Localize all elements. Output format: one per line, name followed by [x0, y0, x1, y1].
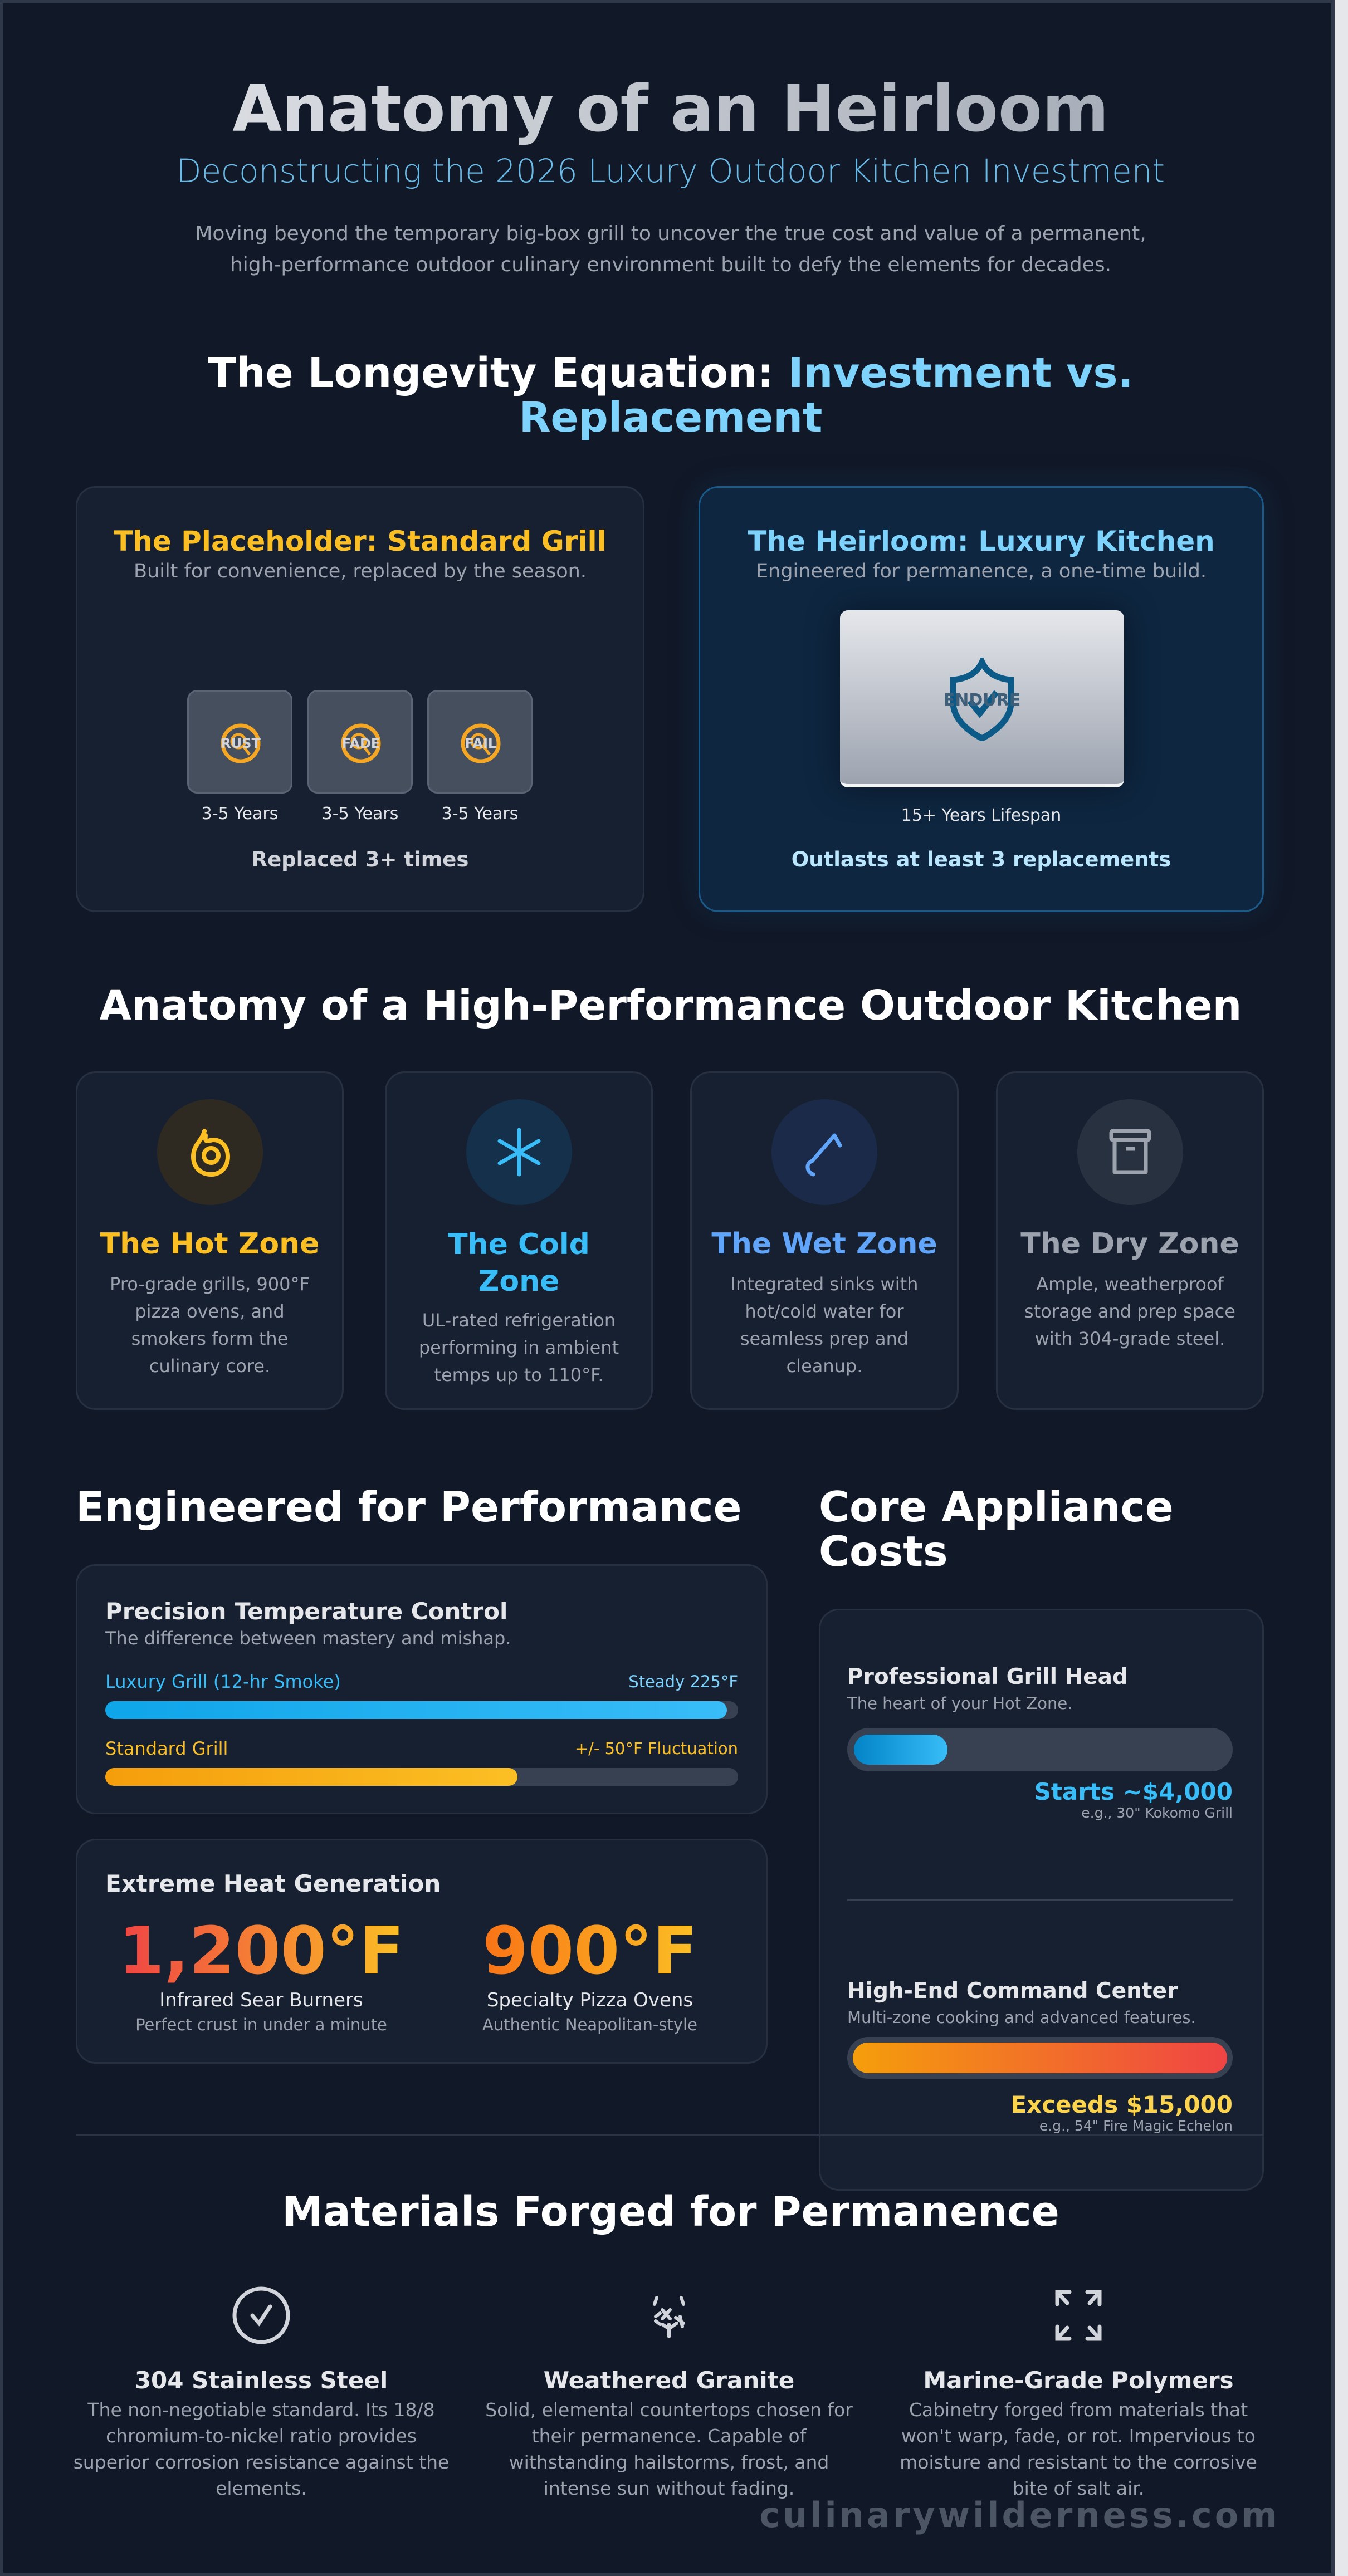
- lifespan label: 15+ Years Lifespan: [901, 806, 1061, 825]
- divider line: [76, 2134, 1264, 2136]
- bar: luxury: Steady 225°F: [628, 1672, 738, 1691]
- heading: anatomy: Anatomy of a High-Performance Outdoor Kitchen: [100, 982, 1242, 1030]
- stat: 1200F: 1,200°F: [119, 1912, 404, 1989]
- cost: command center: e.g., 54" Fire Magic Echelon: [1039, 2118, 1233, 2134]
- watermark: culinarywilderness.com: [759, 2495, 1280, 2535]
- zone text: Ample, weatherproof storage and prep space with 304-grade steel.: [1024, 1274, 1235, 1349]
- material: polymers: Cabinetry forged from materials that won't warp, fade, or rot. Impervious to moisture and resistant to the corrosive bite of salt air.: [900, 2399, 1257, 2499]
- card subtitle: Engineered for permanence, a one-time build.: [756, 560, 1207, 582]
- panel: hot zone: [76, 1071, 344, 1410]
- icon: storage box: [1077, 1099, 1183, 1205]
- zone title: [448, 1228, 590, 1298]
- cost: command center: Exceeds $15,000: [1010, 2091, 1233, 2118]
- panel: cold zone: [385, 1071, 653, 1410]
- cost: command center: [847, 1978, 1233, 2134]
- icons: rust fade fail: 3-5 Years: [322, 804, 398, 824]
- material: stainless steel: The non-negotiable standard. Its 18/8 chromium-to-nickel ratio provides superior corrosion resistance against the elements.: [74, 2399, 449, 2499]
- cost: grill head: e.g., 30" Kokomo Grill: [1081, 1805, 1233, 1821]
- panel: wet zone: [690, 1071, 959, 1410]
- stat: 1200F: [119, 1912, 404, 2034]
- summary: Outlasts at least 3 replacements: [792, 848, 1171, 871]
- bar: standard: +/- 50°F Fluctuation: [575, 1739, 738, 1758]
- heading: materials: Materials Forged for Permanence: [282, 2188, 1059, 2236]
- panel: extreme heat: [76, 1839, 768, 2064]
- icon: fail: [427, 690, 533, 794]
- card subtitle: Built for convenience, replaced by the season.: [134, 560, 587, 582]
- zone title: The Hot Zone: [100, 1227, 319, 1261]
- material: granite: Weathered Granite: [544, 2367, 794, 2394]
- material: stainless steel: [74, 2286, 449, 2499]
- cost: grill head: Starts ~$4,000: [1034, 1778, 1233, 1805]
- stat: 900F: Authentic Neapolitan-style: [482, 2015, 697, 2034]
- title: Anatomy of an Heirloom: [232, 72, 1109, 146]
- stat: 1200F: Perfect crust in under a minute: [135, 2015, 387, 2034]
- icon: fade: [307, 690, 413, 794]
- icon: expand arrows: [1055, 2290, 1102, 2341]
- icon: frost: [653, 2296, 685, 2338]
- panel title: Precision Temperature Control: [105, 1598, 507, 1625]
- stat: 900F: Specialty Pizza Ovens: [487, 1989, 693, 2011]
- cost: command center: High-End Command Center: [847, 1978, 1178, 2004]
- card title: The Heirloom: Luxury Kitchen: [748, 525, 1215, 557]
- icon: check circle: [233, 2286, 290, 2344]
- icon: rust: [187, 690, 292, 794]
- bar: luxury: [105, 1671, 738, 1719]
- cost: command center: Multi-zone cooking and advanced features.: [847, 2008, 1196, 2027]
- cost: grill head: The heart of your Hot Zone.: [847, 1694, 1072, 1713]
- panel: standard grill: [76, 486, 644, 912]
- icons: rust fade fail: 3-5 Years: [442, 804, 518, 824]
- icon: fail: FAIL: [465, 736, 496, 751]
- bar: standard: Standard Grill: [105, 1738, 228, 1759]
- heading: longevity equation: The Longevity Equation: Investment vs. Replacement: [208, 349, 1134, 442]
- material: stainless steel: 304 Stainless Steel: [135, 2367, 388, 2394]
- panel title: Extreme Heat Generation: [105, 1870, 441, 1897]
- panel subtitle: The difference between mastery and mishap.: [105, 1628, 511, 1649]
- icon: flame: [157, 1099, 263, 1205]
- heading: core costs: Core Appliance Costs: [819, 1482, 1174, 1576]
- stat: 900F: [482, 1912, 697, 2034]
- material: granite: Solid, elemental countertops chosen for their permanence. Capable of withstanding hailstorms, frost, and intense sun without fading.: [485, 2399, 853, 2499]
- stat: 1200F: Infrared Sear Burners: [159, 1989, 363, 2011]
- icon: rust: RUST: [221, 736, 261, 751]
- zone title: The Dry Zone: [1020, 1227, 1239, 1261]
- bar: luxury: Luxury Grill (12-hr Smoke): [105, 1671, 341, 1692]
- cost: grill head: Professional Grill Head: [847, 1664, 1128, 1689]
- icons: rust fade fail: 3-5 Years: [202, 804, 278, 824]
- stat: 900F: 900°F: [482, 1912, 697, 1989]
- zone text: Integrated sinks with hot/cold water for seamless prep and cleanup.: [731, 1274, 918, 1377]
- card title: The Placeholder: Standard Grill: [114, 525, 607, 557]
- zone title: The Cold: [448, 1228, 590, 1261]
- labels: years: [202, 804, 518, 824]
- subtitle: Deconstructing the 2026 Luxury Outdoor Kitchen Investment: [177, 152, 1165, 190]
- material: polymers: Marine-Grade Polymers: [923, 2367, 1234, 2394]
- image: shield plate: [840, 610, 1124, 787]
- bar: standard: [105, 1738, 738, 1786]
- icon: snowflake: [466, 1099, 572, 1205]
- panel: dry zone: [996, 1071, 1264, 1410]
- zone text: Pro-grade grills, 900°F pizza ovens, and smokers form the culinary core.: [110, 1274, 310, 1377]
- material: granite: [485, 2296, 853, 2499]
- zone title: Zone: [478, 1265, 559, 1298]
- heading: engineered: Engineered for Performance: [76, 1482, 742, 1531]
- divider: [847, 1899, 1233, 1901]
- icons: rust fade fail: [187, 690, 533, 824]
- summary: Replaced 3+ times: [252, 848, 468, 871]
- image: shield plate: ENDURE: [944, 690, 1020, 710]
- icon: fade: FADE: [342, 736, 380, 751]
- panel: precision temperature: [76, 1564, 768, 1814]
- intro paragraph: Moving beyond the temporary big-box grill to uncover the true cost and value of a permanent, high-performance outdoor culinary environment built to defy the elements for decades.: [195, 222, 1146, 276]
- cost: grill head: [847, 1664, 1233, 1821]
- icon: faucet: [771, 1099, 877, 1205]
- panel: appliance costs: [819, 1609, 1264, 2191]
- title: [3, 70, 1338, 148]
- zone title: The Wet Zone: [711, 1227, 937, 1261]
- zone text: UL-rated refrigeration performing in ambient temps up to 110°F.: [419, 1310, 619, 1385]
- material: polymers: [900, 2290, 1257, 2499]
- panel: luxury kitchen: [699, 486, 1264, 912]
